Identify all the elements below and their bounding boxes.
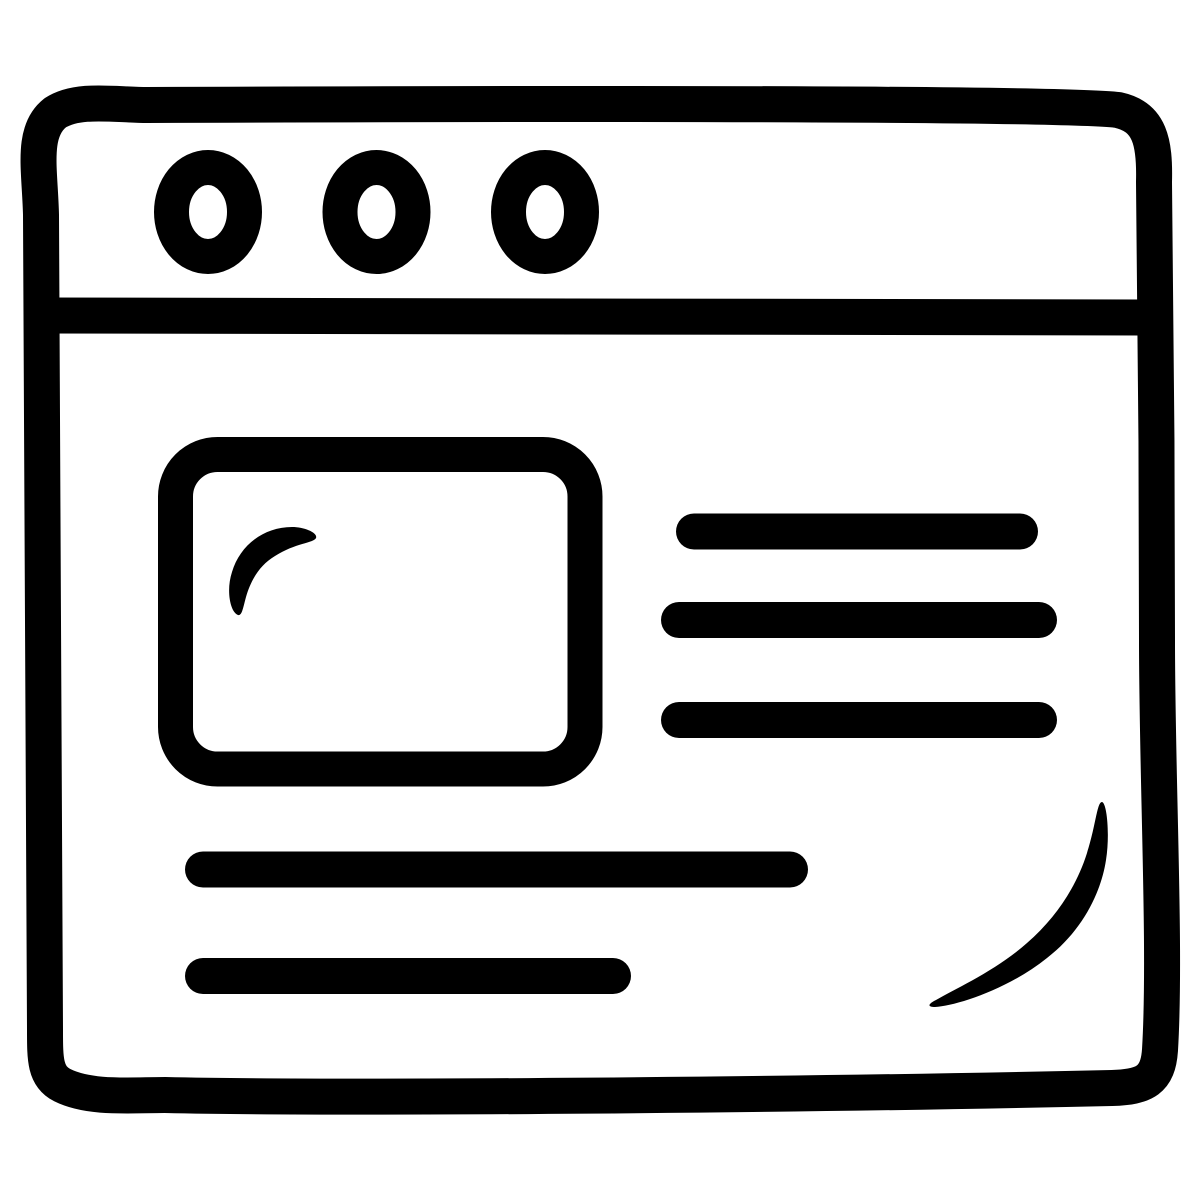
image frame [176, 454, 585, 769]
bottom text line 2 [203, 958, 613, 994]
side text line 2 [679, 602, 1039, 638]
button 3 [508, 168, 582, 256]
window control buttons [172, 168, 582, 256]
button 2 [340, 168, 413, 256]
side text line 1 [694, 514, 1020, 550]
title bar divider [42, 316, 1156, 318]
text lines [203, 532, 1039, 976]
button 1 [172, 168, 244, 256]
corner highlight [929, 802, 1108, 1007]
side text line 3 [679, 702, 1039, 738]
bottom text line 1 [203, 852, 790, 888]
image placeholder [176, 454, 585, 769]
image highlight [229, 527, 316, 615]
window frame outline [39, 103, 1162, 1097]
